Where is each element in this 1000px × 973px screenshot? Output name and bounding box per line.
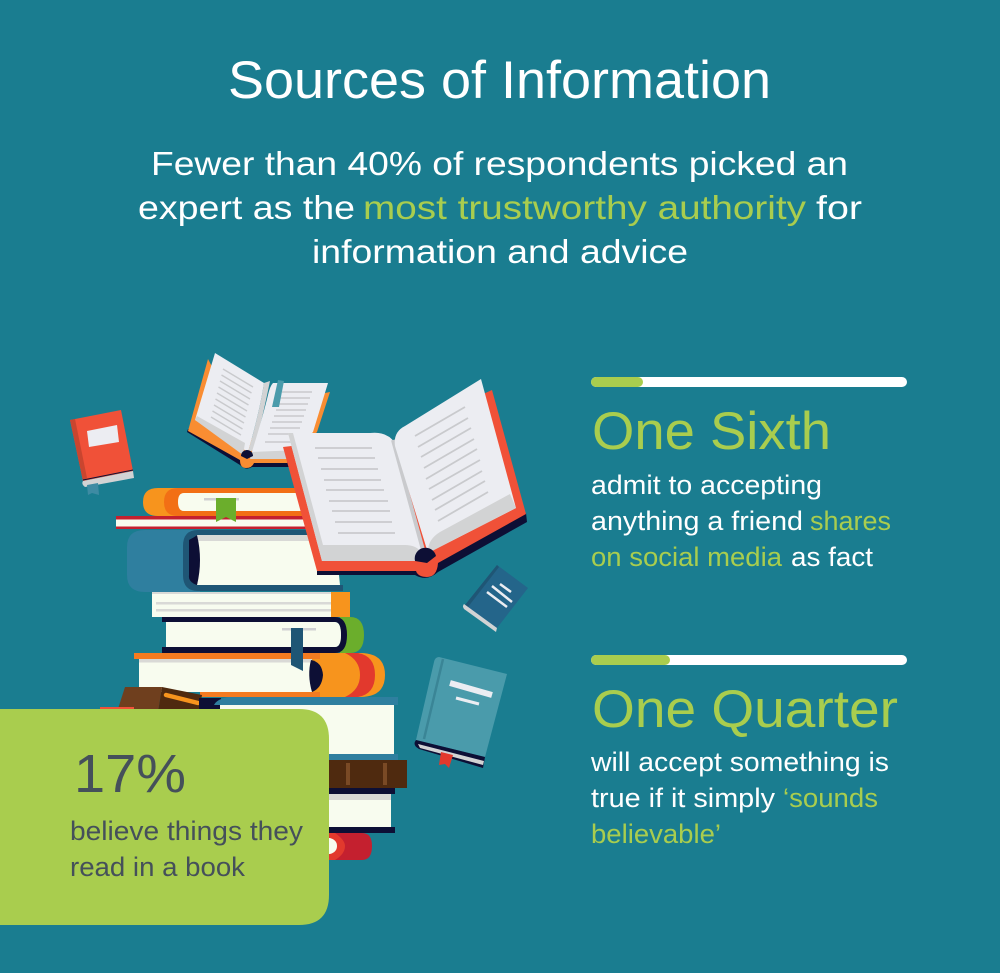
panel: one quarter — [590, 655, 907, 849]
text lines: right page — [415, 407, 488, 521]
right page shading — [428, 494, 516, 553]
book: orange with red band — [134, 653, 385, 697]
bookmark: dark blue — [291, 628, 303, 671]
intro text block: Fewer than 40% of respondents picked an — [151, 145, 848, 182]
bookmark: teal — [272, 380, 284, 407]
spine dot — [241, 450, 253, 459]
icon: red closed book — [70, 410, 134, 495]
intro text block: information and advice — [312, 233, 688, 270]
text: one quarter description: ‘sounds — [783, 783, 878, 813]
text: one sixth description: as fact — [791, 542, 874, 572]
text lines: left page — [315, 448, 395, 533]
book: navy bottom — [300, 788, 395, 833]
cover shadow — [317, 513, 527, 578]
book: orange top — [143, 488, 310, 516]
illustration: stack of books — [100, 488, 407, 860]
book: tilted brown — [100, 687, 221, 712]
cover — [283, 390, 526, 577]
text: one sixth description — [591, 470, 891, 572]
callout text — [70, 816, 304, 882]
heading: one quarter: One Quarter — [592, 680, 898, 739]
illustration: large open book with red cover — [283, 379, 527, 578]
left page — [288, 433, 423, 561]
icon: teal book — [415, 657, 507, 768]
callout text: read in a book — [70, 852, 246, 882]
text: one sixth description: shares — [810, 506, 891, 536]
book: striped pages — [152, 592, 350, 617]
intro text block: most trustworthy authority — [363, 189, 807, 226]
book: large white with blue cover — [214, 697, 398, 760]
callout text: believe things they — [70, 816, 304, 846]
book: thin red — [116, 516, 316, 529]
text: one sixth description: admit to accepting — [591, 470, 822, 500]
book: brown spine — [300, 760, 407, 788]
panel: 17% callout — [0, 709, 329, 925]
icon: small blue book — [463, 565, 528, 632]
text: one quarter description: true if it simply — [591, 783, 776, 813]
progress bar: one quarter — [591, 655, 907, 665]
book: navy with green spine — [162, 617, 364, 653]
text: one quarter description: believable’ — [591, 819, 721, 849]
title: Sources of Information — [228, 51, 771, 110]
panel: one sixth — [591, 377, 907, 572]
right page — [395, 379, 516, 553]
left page shading — [288, 433, 421, 561]
text: one sixth description: on social media — [591, 542, 782, 572]
progress bar: one sixth — [591, 377, 907, 387]
heading: one sixth: One Sixth — [592, 402, 831, 461]
text lines: right page — [265, 392, 312, 442]
intro text block — [138, 145, 862, 270]
stat: 17%: 17% — [74, 744, 186, 804]
intro text block: for — [816, 189, 862, 226]
bookmark: green — [216, 498, 236, 522]
text lines: left page — [211, 369, 253, 435]
text: one quarter description: will accept something is — [590, 747, 889, 777]
intro text block: expert as the — [138, 189, 355, 226]
text: one sixth description: anything a friend — [591, 506, 803, 536]
gutter — [393, 440, 423, 550]
illustration: small open book with orange cover — [187, 353, 330, 469]
book: red bottom — [300, 833, 372, 860]
text: one quarter description — [590, 747, 889, 849]
spine dot — [415, 548, 436, 563]
book: blue — [127, 530, 343, 592]
